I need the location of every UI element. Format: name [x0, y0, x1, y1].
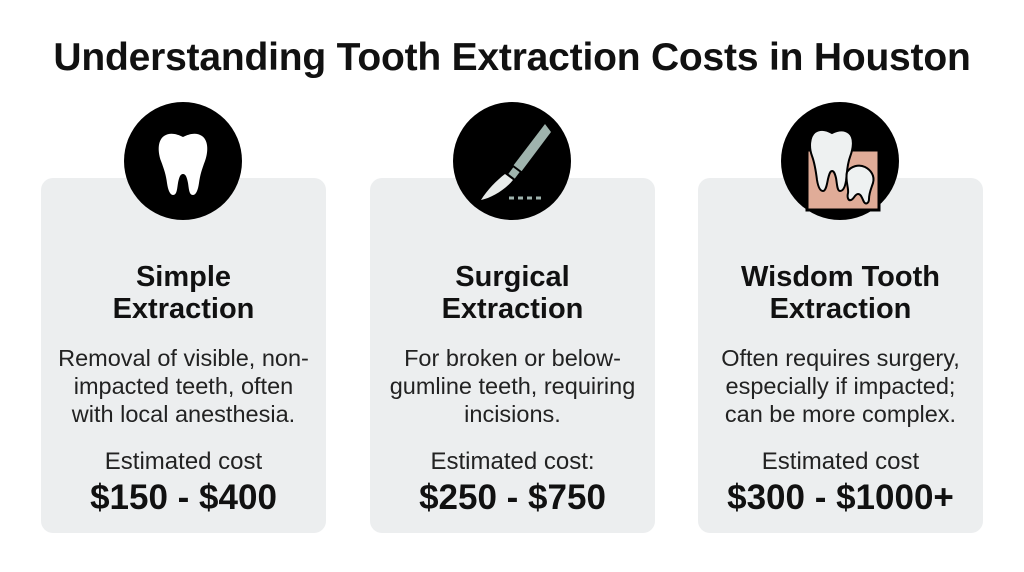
- text: surgical description: [390, 345, 635, 427]
- panel: simple extraction: [41, 178, 326, 533]
- heading: wisdom: Wisdom Tooth: [741, 261, 940, 293]
- heading: surgical: [442, 261, 583, 325]
- panel: surgical extraction: [370, 178, 655, 533]
- price: surgical: $250 - $750: [419, 478, 606, 517]
- heading: wisdom: [741, 261, 940, 325]
- heading: simple: [113, 261, 254, 325]
- heading: simple: Extraction: [113, 293, 254, 325]
- icon: scalpel: [453, 102, 571, 220]
- panel: wisdom tooth extraction: [698, 178, 983, 533]
- label: estimated cost: Estimated cost: [105, 448, 262, 475]
- text: surgical description: gumline teeth, requiring: [390, 373, 635, 399]
- price: wisdom: $300 - $1000+: [727, 478, 954, 517]
- heading: surgical: Extraction: [442, 293, 583, 325]
- text: wisdom description: Often requires surgery,: [721, 345, 960, 371]
- text: surgical description: For broken or below-: [404, 345, 621, 371]
- text: simple description: with local anesthesia.: [72, 401, 295, 427]
- text: simple description: Removal of visible, non-: [58, 345, 309, 371]
- heading: wisdom: Extraction: [770, 293, 911, 325]
- text: wisdom description: especially if impacted;: [726, 373, 955, 399]
- price: simple: $150 - $400: [90, 478, 277, 517]
- text: simple description: impacted teeth, often: [74, 373, 293, 399]
- heading: surgical: Surgical: [455, 261, 570, 293]
- text: surgical description: incisions.: [464, 401, 561, 427]
- title: Understanding Tooth Extraction Costs in Houston: [53, 36, 971, 79]
- icon: wisdom tooth: [781, 102, 899, 220]
- text: wisdom description: can be more complex.: [725, 401, 956, 427]
- icon: tooth: [124, 102, 242, 220]
- text: simple description: [58, 345, 309, 427]
- label: estimated cost: Estimated cost: [762, 448, 919, 475]
- label: estimated cost: Estimated cost:: [430, 448, 595, 475]
- heading: simple: Simple: [136, 261, 231, 293]
- text: wisdom description: [721, 345, 960, 427]
